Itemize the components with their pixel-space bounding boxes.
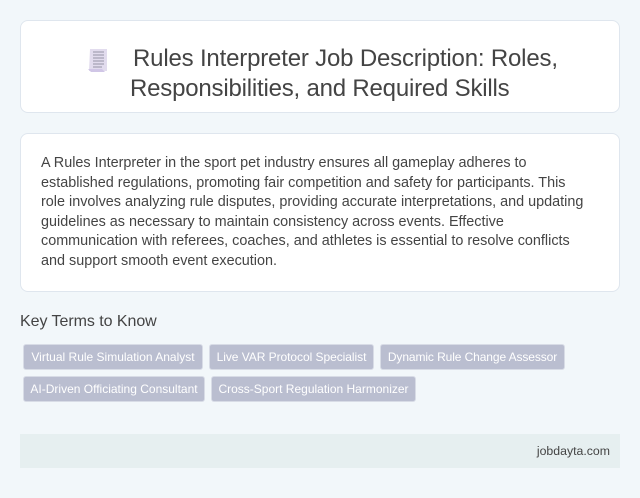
title: Rules Interpreter Job Description: Roles, bbox=[133, 45, 558, 72]
description text: A Rules Interpreter in the sport pet industry ensures all gameplay adheres to bbox=[41, 155, 527, 171]
description text: and support smooth event execution. bbox=[41, 252, 277, 268]
heading: key terms: Key Terms to Know bbox=[20, 313, 157, 330]
tag bbox=[380, 344, 565, 370]
title bbox=[130, 45, 558, 102]
icon: document bbox=[88, 49, 107, 72]
tag: Cross-Sport Regulation Harmonizer bbox=[218, 382, 409, 396]
panel: description bbox=[20, 133, 620, 292]
tag: Virtual Rule Simulation Analyst bbox=[31, 350, 195, 364]
tag bbox=[23, 376, 205, 402]
panel: title card bbox=[20, 20, 620, 113]
description text: established regulations, promoting fair competition and safety for participants. This bbox=[41, 174, 565, 190]
tag: AI-Driven Officiating Consultant bbox=[30, 382, 198, 396]
tag bbox=[211, 376, 416, 402]
description text: communication with referees, coaches, and athletes is essential to resolve conflicts bbox=[41, 233, 570, 249]
description text: guidelines as necessary to maintain consistency across events. Effective bbox=[41, 214, 504, 230]
footer text: jobdayta.com bbox=[537, 444, 610, 458]
tag: Dynamic Rule Change Assessor bbox=[388, 350, 557, 364]
tag bbox=[23, 344, 203, 370]
footer bar bbox=[20, 434, 620, 468]
tag: Live VAR Protocol Specialist bbox=[217, 350, 366, 364]
title: Responsibilities, and Required Skills bbox=[130, 75, 509, 102]
description text: role involves analyzing rule disputes, providing accurate interpretations, and updating bbox=[41, 194, 583, 210]
description text bbox=[41, 155, 583, 268]
tag bbox=[209, 344, 374, 370]
